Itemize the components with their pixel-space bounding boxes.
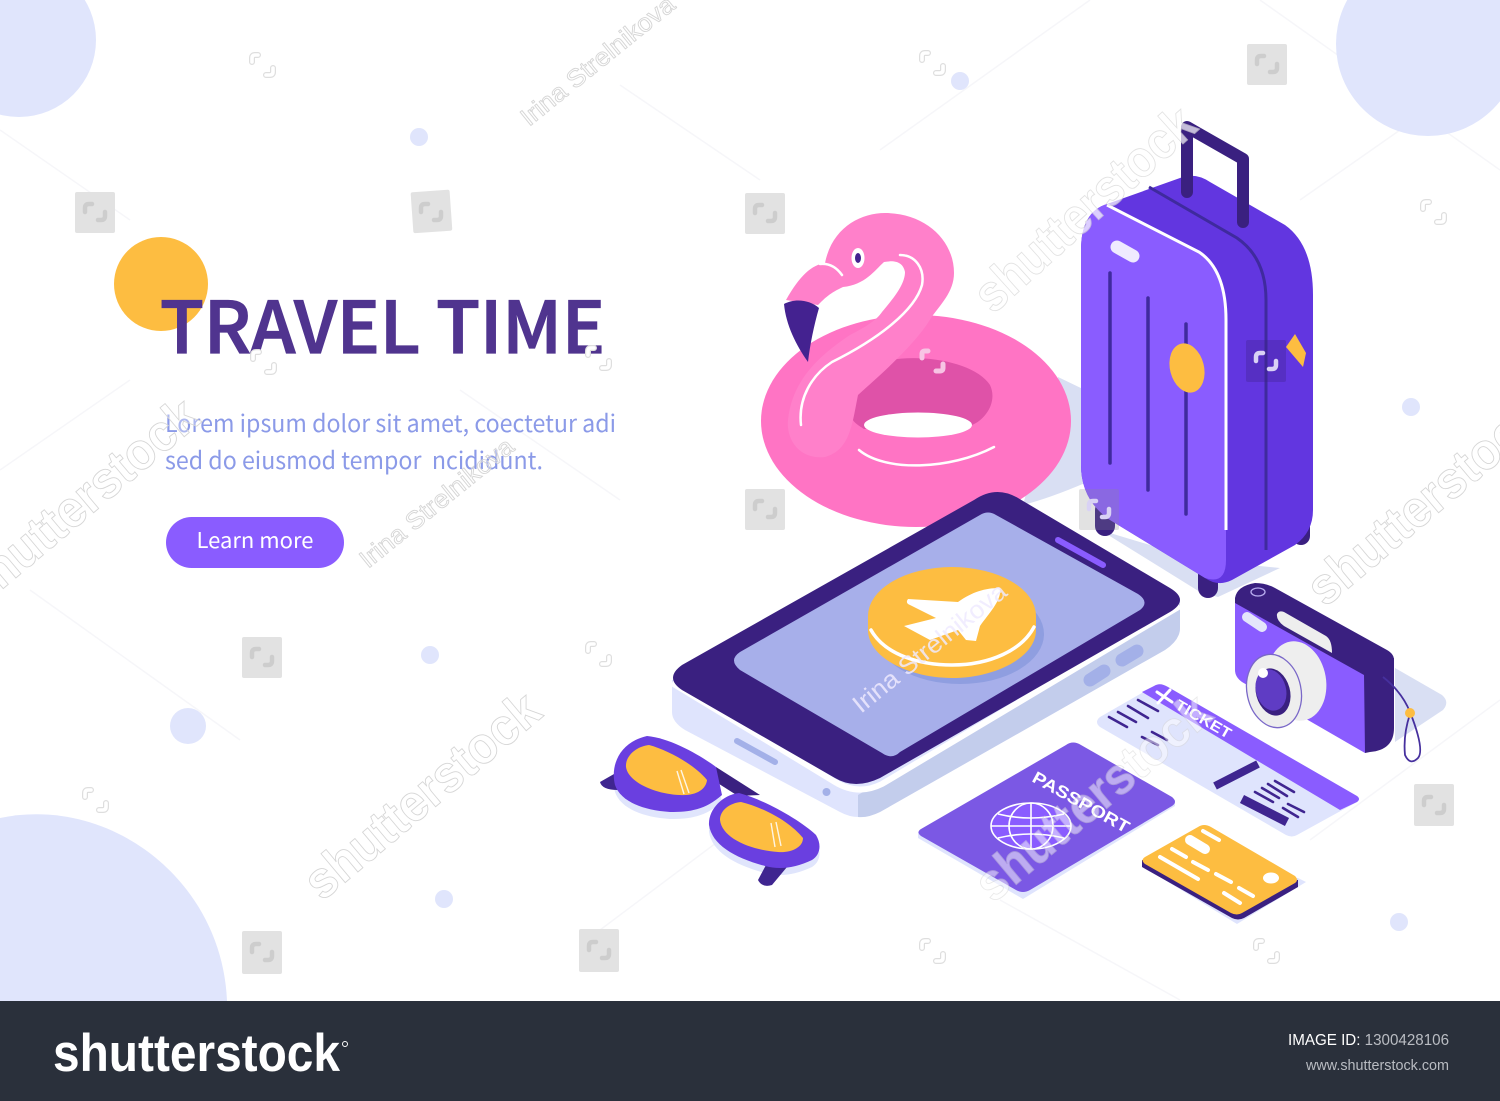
watermark: photographer name and agency text: shutterstock bbox=[292, 680, 552, 911]
icon: flamingo float bbox=[761, 213, 1071, 527]
watermark: grey squares bbox=[75, 44, 1454, 974]
button: learn more: Learn more bbox=[196, 524, 314, 555]
icon: suitcase bbox=[1081, 127, 1313, 598]
icon: smartphone bbox=[672, 492, 1180, 817]
watermark: small swirls bbox=[85, 53, 1444, 961]
title: TRAVEL TIME bbox=[160, 272, 605, 374]
body text: sed do eiusmod tempor ncididunt. bbox=[165, 441, 543, 476]
footer bar bbox=[0, 1001, 1500, 1101]
icon: passport: PASSPORT bbox=[1029, 768, 1133, 837]
icon: passport bbox=[918, 742, 1175, 899]
footer image id: IMAGE ID: 1300428106 bbox=[1288, 1032, 1449, 1049]
icon: plane button bbox=[868, 567, 1044, 684]
icon: sunglasses bbox=[600, 736, 819, 886]
watermark: photographer name and agency text: Irina Strelnikova bbox=[515, 0, 681, 132]
watermark: photographer name and agency text: shutterstock bbox=[962, 95, 1208, 324]
icon: boarding ticket bbox=[1097, 684, 1359, 836]
watermark: photographer name and agency text: Irina Strelnikova bbox=[354, 432, 520, 574]
icon: credit card bbox=[1142, 825, 1306, 924]
shadow below suitcase bbox=[1100, 530, 1280, 597]
body text bbox=[165, 404, 616, 476]
watermark: photographer name and agency text: shutterstock bbox=[963, 682, 1223, 913]
shadow behind ring bbox=[1023, 377, 1085, 505]
button: learn more bbox=[166, 517, 344, 568]
body text: Lorem ipsum dolor sit amet, coectetur adi bbox=[165, 404, 616, 439]
watermark: photographer name and agency text: Irina Strelnikova bbox=[847, 577, 1013, 719]
footer url: www.shutterstock.com bbox=[1305, 1058, 1449, 1074]
icon: camera bbox=[1235, 583, 1446, 761]
footer logo: shutterstock bbox=[53, 1024, 340, 1083]
footer registered mark bbox=[342, 1042, 348, 1046]
icon: boarding ticket: TICKET bbox=[1172, 697, 1234, 742]
passport globe bbox=[991, 803, 1071, 849]
yellow accent circle bbox=[114, 237, 208, 331]
